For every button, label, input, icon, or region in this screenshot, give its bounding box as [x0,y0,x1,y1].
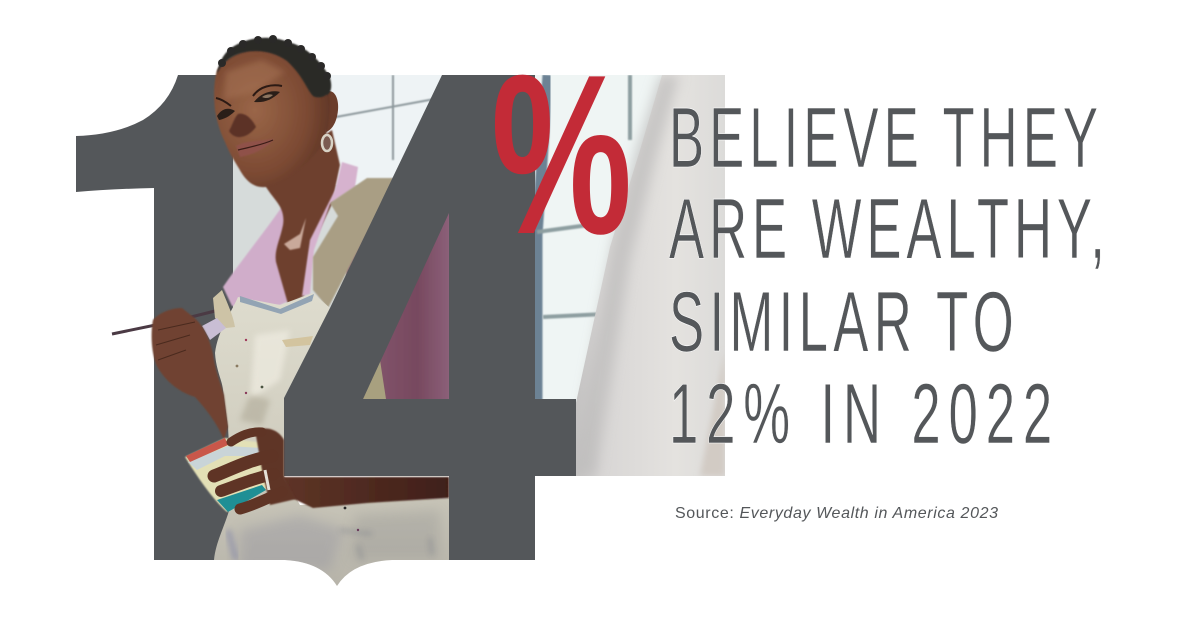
left collar [223,205,300,306]
headline line 4: 12% IN 2022 [669,366,1052,461]
hand and wrist [152,308,228,440]
fingers [214,432,282,509]
photo: window and curtain background [233,75,725,476]
paintbrush head [213,290,235,328]
forearm [283,477,449,508]
paintbrush handle [112,311,215,334]
ear [326,91,338,132]
apron collar [240,294,314,314]
apron pocket [282,336,313,347]
hair [217,35,331,97]
numeral 4 [284,75,576,560]
jacket [313,170,400,308]
apron [205,285,455,590]
person: hand holding brush [112,290,235,440]
purple sleeve [340,140,450,405]
mouth [236,139,274,157]
eyes [217,91,280,120]
brows [216,85,282,106]
jacket sliver [363,360,386,399]
earring [322,135,332,151]
person: clothing [205,130,455,590]
chest highlight [284,218,306,250]
source note: Source: Everyday Wealth in America 2023 [675,505,998,522]
shirt cuff [202,318,226,340]
person: head in front of the numeral [214,35,338,187]
ring [265,470,269,490]
neck and chest [262,130,340,304]
headline line 3: SIMILAR TO [669,274,1014,369]
finger creases [156,322,195,360]
percent sign: % [491,26,632,282]
numeral 1 [76,75,233,560]
forehead highlight [224,60,285,100]
nose [229,114,256,137]
infographic canvas [76,35,1100,586]
headline [669,90,1105,461]
face [214,47,330,187]
right collar [302,162,358,296]
palm [255,428,296,505]
headline line 2: ARE WEALTHY, [669,181,1105,276]
person: paint cup and holding hand [185,428,296,512]
paint cup [185,438,268,512]
headline line 1: BELIEVE THEY [669,90,1098,185]
